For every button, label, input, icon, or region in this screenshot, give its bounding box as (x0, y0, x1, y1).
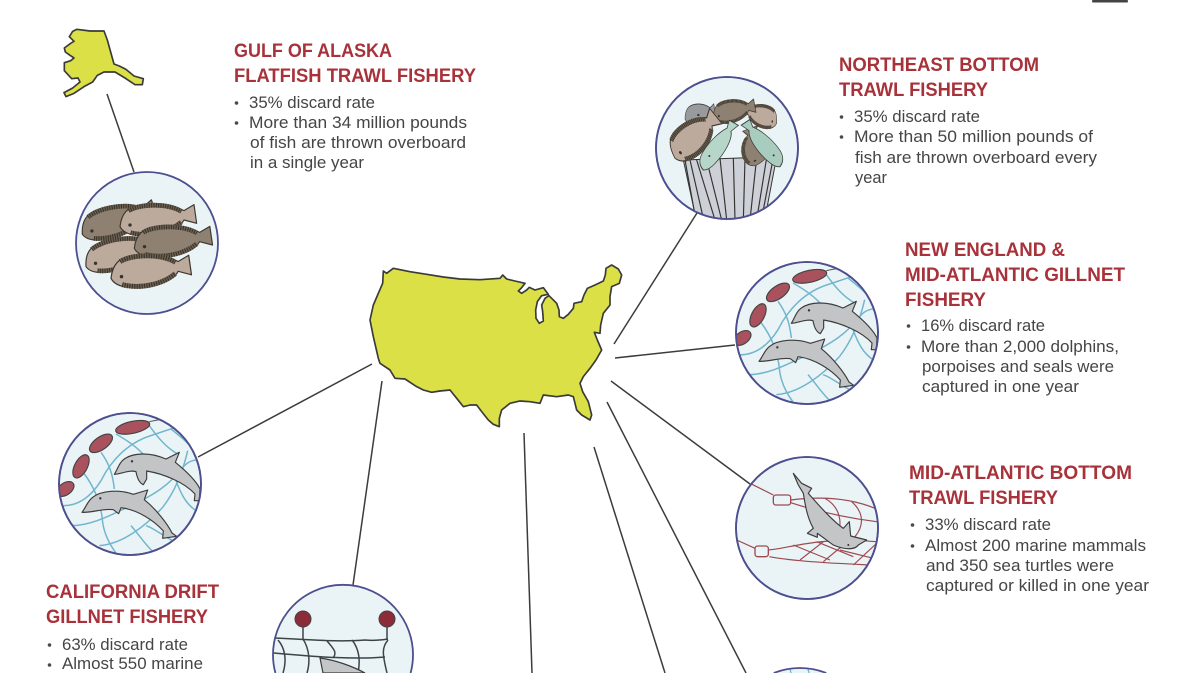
text: New England and Mid-Atlantic gillnet fishery: 16% discard rate (921, 317, 1045, 335)
circle: drift gillnet with buoys (273, 585, 413, 673)
circle: bottom trawl with dolphin (736, 457, 878, 599)
circle: gillnet with dolphins (northeast) (731, 262, 878, 404)
text: New England and Mid-Atlantic gillnet fishery: porpoises and seals were (922, 358, 1114, 376)
text: Northeast bottom trawl fishery: NORTHEAST BOTTOM (839, 54, 1039, 76)
circle: bucket of fish (656, 77, 798, 222)
text: Mid-Atlantic bottom trawl fishery (909, 462, 1150, 595)
text: Northeast bottom trawl fishery: TRAWL FISHERY (839, 79, 988, 101)
text: Northeast bottom trawl fishery: More than 50 million pounds of (854, 128, 1093, 146)
text: Northeast bottom trawl fishery: 35% discard rate (854, 108, 980, 126)
circle: gillnet with dolphins (west coast) (54, 413, 201, 555)
text: New England and Mid-Atlantic gillnet fishery: NEW ENGLAND & (905, 239, 1065, 261)
logo fragment at top edge (1092, 0, 1128, 2)
text: Gulf of Alaska flatfish trawl fishery (234, 40, 476, 172)
text: Gulf of Alaska flatfish trawl fishery: 35% discard rate (249, 94, 375, 112)
circle: partly visible at bottom edge (774, 668, 826, 673)
text: New England and Mid-Atlantic gillnet fishery: MID-ATLANTIC GILLNET (905, 264, 1125, 286)
text: Gulf of Alaska flatfish trawl fishery: More than 34 million pounds (249, 114, 467, 132)
text: California drift gillnet fishery (46, 581, 219, 673)
text: California drift gillnet fishery: GILLNET FISHERY (46, 606, 208, 628)
map: contiguous United States (370, 265, 622, 427)
text: New England and Mid-Atlantic gillnet fishery: captured in one year (922, 378, 1080, 396)
text: Gulf of Alaska flatfish trawl fishery: of fish are thrown overboard (250, 134, 466, 152)
text: Gulf of Alaska flatfish trawl fishery: in a single year (250, 154, 365, 172)
text: Mid-Atlantic bottom trawl fishery: captured or killed in one year (926, 577, 1150, 595)
map: Alaska (64, 29, 143, 97)
text: Gulf of Alaska flatfish trawl fishery: GULF OF ALASKA (234, 40, 392, 62)
text: Gulf of Alaska flatfish trawl fishery: FLATFISH TRAWL FISHERY (234, 65, 476, 87)
text: New England and Mid-Atlantic gillnet fishery: FISHERY (905, 289, 986, 311)
text: Mid-Atlantic bottom trawl fishery: Almost 200 marine mammals (925, 537, 1146, 555)
text: Northeast bottom trawl fishery: fish are thrown overboard every (855, 149, 1098, 167)
text: California drift gillnet fishery: Almost 550 marine (62, 655, 203, 673)
text: New England and Mid-Atlantic gillnet fishery (905, 239, 1125, 396)
text: California drift gillnet fishery: 63% discard rate (62, 636, 188, 654)
circle: flatfish pile (76, 172, 218, 314)
text: Mid-Atlantic bottom trawl fishery: MID-ATLANTIC BOTTOM (909, 462, 1132, 484)
text: Mid-Atlantic bottom trawl fishery: and 350 sea turtles were (926, 557, 1114, 575)
text: New England and Mid-Atlantic gillnet fishery: More than 2,000 dolphins, (921, 338, 1119, 356)
text: Northeast bottom trawl fishery: year (855, 169, 887, 187)
text: Mid-Atlantic bottom trawl fishery: 33% discard rate (925, 516, 1051, 534)
text: California drift gillnet fishery: CALIFORNIA DRIFT (46, 581, 219, 603)
text: Mid-Atlantic bottom trawl fishery: TRAWL FISHERY (909, 487, 1058, 509)
connector lines (107, 94, 750, 673)
text: Northeast bottom trawl fishery (839, 54, 1098, 187)
